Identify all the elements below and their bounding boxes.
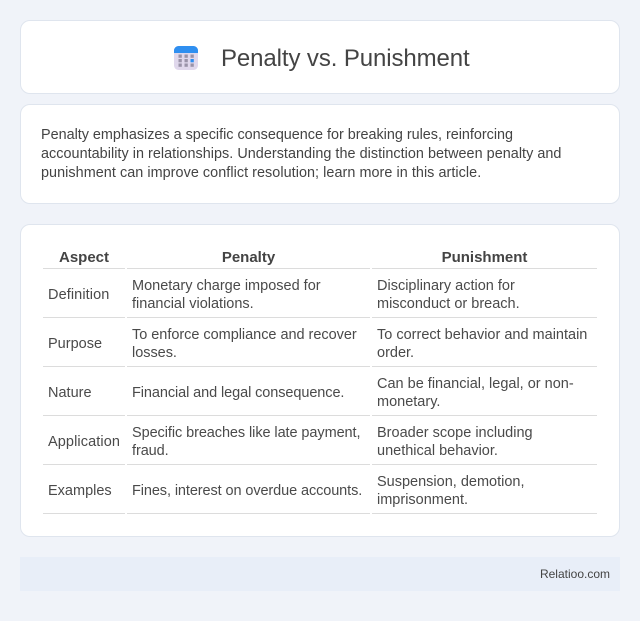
row: Application label: Application (48, 434, 120, 450)
row: Definition penalty: financial violations. (132, 296, 254, 312)
row: Nature punishment: Can be financial, legal, or non- (377, 376, 574, 392)
panel: intro text card (20, 104, 620, 204)
row: Definition label: Definition (48, 287, 109, 303)
row: Purpose punishment (377, 327, 587, 361)
row: Examples punishment: imprisonment. (377, 492, 468, 508)
row: Application punishment: Broader scope including (377, 425, 533, 441)
footer bar (20, 557, 620, 591)
row: Definition penalty (132, 278, 321, 312)
header: Penalty: Penalty (222, 249, 275, 266)
intro paragraph: punishment can improve conflict resolution; learn more in this article. (41, 165, 481, 181)
row: Definition punishment: Disciplinary action for (377, 278, 515, 294)
row: Application penalty: fraud. (132, 443, 169, 459)
row: Nature label: Nature (48, 385, 92, 401)
row: Nature punishment: monetary. (377, 394, 440, 410)
row: Examples punishment: Suspension, demotion, (377, 474, 525, 490)
row: Purpose punishment: To correct behavior and maintain (377, 327, 587, 343)
panel: comparison table card (20, 224, 620, 537)
row: Application penalty: Specific breaches like late payment, (132, 425, 360, 441)
title: Penalty vs. Punishment (221, 45, 470, 72)
row: Definition penalty: Monetary charge imposed for (132, 278, 321, 294)
row: Nature punishment (377, 376, 574, 410)
footer brand: Relatioo.com (540, 567, 610, 581)
row: Purpose penalty: To enforce compliance and recover (132, 327, 357, 343)
row: Application penalty (132, 425, 360, 459)
row: Purpose punishment: order. (377, 345, 414, 361)
panel: title card (20, 20, 620, 94)
row: Purpose penalty (132, 327, 357, 361)
header: Punishment: Punishment (442, 249, 527, 266)
row: Examples penalty: Fines, interest on overdue accounts. (132, 483, 362, 499)
icon: calendar (174, 46, 198, 70)
row: Purpose penalty: losses. (132, 345, 177, 361)
header: Aspect: Aspect (59, 249, 109, 266)
row: Purpose label: Purpose (48, 336, 102, 352)
intro paragraph: Penalty emphasizes a specific consequence for breaking rules, reinforcing (41, 127, 513, 143)
row: Definition punishment: misconduct or breach. (377, 296, 520, 312)
row: Application punishment: unethical behavior. (377, 443, 498, 459)
row: Application punishment (377, 425, 533, 459)
row: Definition punishment (377, 278, 520, 312)
intro paragraph (41, 127, 561, 181)
intro paragraph: accountability in relationships. Understanding the distinction between penalty and (41, 146, 561, 162)
row: Examples punishment (377, 474, 525, 508)
row: Nature penalty: Financial and legal consequence. (132, 385, 344, 401)
row: Examples label: Examples (48, 483, 112, 499)
